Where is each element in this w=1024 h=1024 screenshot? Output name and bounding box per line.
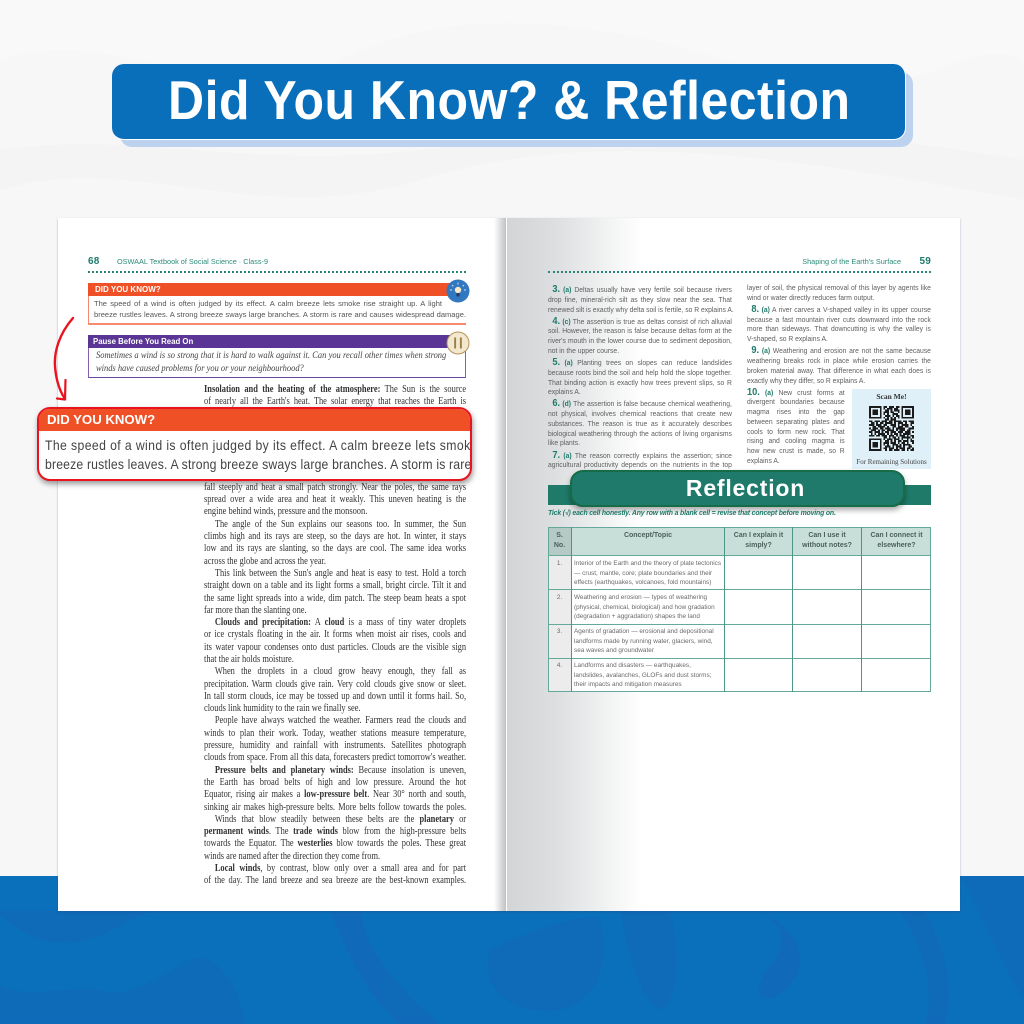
row 3: landforms made by running water, glaciers, wind, (574, 638, 713, 645)
text block: left page body: winds are named after the direction they come from. (204, 851, 380, 862)
callout header (39, 409, 470, 431)
text block: answers left column: 5. (a) Planting trees on slopes can reduce landslides (552, 356, 732, 368)
text block: answers left column: like plants. (548, 438, 580, 447)
text block: left page body: precipitation. Warm clouds give rain. Very cold clouds give snow or sleet. (204, 679, 466, 690)
text block: answers left column: 6. (d) The assertion is false because chemical weathering, (552, 397, 732, 409)
box text: breeze rustles leaves. A strong breeze sways large branches. A storm is rare and causes widespread damage. (94, 310, 466, 319)
text block: answers right column: 9. (a) Weathering and erosion are not the same because (751, 344, 931, 356)
dotted rule (548, 271, 931, 273)
table header background (548, 527, 931, 555)
page number: 59 (919, 256, 931, 267)
text block: answers right column: rising and cooling magma is (747, 436, 845, 445)
text block: answers left column: That binding action is exactly how trees prevent slips, so R (548, 378, 732, 387)
row 1 (557, 560, 721, 586)
row 4: their impacts and mitigation measures (574, 681, 682, 688)
callout text (45, 438, 472, 472)
text block: answers right column: how new crust is made, so R (747, 446, 845, 455)
open book (58, 218, 960, 911)
row 2 (557, 594, 715, 620)
text block: answers left column: agricultural productivity depends on the nutrients in the top (548, 460, 732, 469)
row 1: effects (earthquakes, volcanoes, fold mountains) (574, 579, 711, 586)
text block: left page body: the same light spreads into a wide, dim patch. The steep beam heats a spot (204, 593, 466, 604)
text block: answers right column: wind or water directly reduces farm output. (747, 293, 874, 302)
text block: left page body: far more than the slanting one. (204, 605, 307, 616)
text block: answers right column: magma rises into the gap (747, 407, 845, 416)
row 3: Agents of gradation — erosional and depositional (574, 628, 714, 635)
text block: answers right column: more than sideways. That downcutting is why the valley is (747, 324, 931, 333)
text block: answers left column: river's mouth in the lower course due to sediment deposition, (548, 336, 732, 345)
text block: answers right column: weathering breaks rock in place while erosion carries the (747, 356, 931, 365)
title text: Did You Know? & Reflection (168, 69, 851, 131)
text block: left page body: Local winds, by contrast, blow only over a small area and for part (215, 863, 466, 874)
dotted rule (88, 271, 466, 273)
header labels: without notes? (802, 542, 852, 549)
text block: insolation paragraph start (204, 384, 466, 407)
row 2: Weathering and erosion — types of weathering (574, 594, 707, 601)
text block: left page body: engine behind winds, pressure and the monsoon. (204, 506, 367, 517)
row 4: 4. (557, 662, 562, 669)
text block: left page body: The angle of the Sun explains our seasons too. In summer, the Sun (215, 519, 466, 530)
S.No column shade (548, 555, 571, 692)
row 3: 3. (557, 628, 562, 635)
text block: left page body: its water vapour condenses onto dust particles. Clouds are the visible sign (204, 642, 466, 653)
left page header (88, 256, 466, 273)
icon: QR code (869, 406, 914, 451)
spine shadow on right page (507, 218, 642, 911)
text block: left page body: fall steeply and heat a small patch strongly. Near the poles, the same rays (204, 482, 466, 493)
row 1: Interior of the Earth and the theory of plate tectonics (574, 560, 721, 567)
banner shadow (120, 72, 913, 147)
text block: answers right column: because a fast mountain river cuts downward into the rock (747, 315, 931, 324)
callout: enlarged did you know (37, 407, 472, 481)
icon: pause symbol (446, 332, 470, 354)
text block: answers left column: explains A. (548, 387, 581, 396)
text block: left page body (204, 482, 466, 886)
text block: answers left column: soil. However, the reason is false because deltas form at the (548, 326, 732, 335)
header labels (554, 532, 923, 549)
text block: answers right column: explains A. (747, 456, 780, 465)
text block: answers right column (747, 283, 931, 465)
text block: answers left column: renewed silt is exactly why delta soil is fertile, so R explains A. (548, 304, 734, 314)
scan heading: Scan Me! (876, 392, 907, 401)
text block: left page body: Winds that blow steadily between these belts are the planetary or (215, 814, 466, 825)
text block: left page body: sinking air makes high-pressure belts. More belts follow towards the poles. (204, 802, 466, 813)
box text (94, 299, 466, 319)
text block: answers right column: 8. (a) A river carves a V-shaped valley in its upper course (751, 303, 931, 315)
icon: light bulb (446, 280, 470, 302)
row 4: landslides, avalanches, GLOFs and dust storms; (574, 672, 711, 679)
text block: answers left column: 4. (c) The assertion is true as deltas consist of rich alluvial (552, 315, 732, 327)
arrow: callout pointer (54, 316, 74, 401)
text block: left page body: Equator, rising air makes a low-pressure belt. Near 30° north and south, (204, 789, 466, 800)
running head: OSWAAL Textbook of Social Science · Class-9 (117, 257, 268, 266)
header labels: Can I use it (808, 532, 846, 539)
page number: 68 (88, 256, 100, 267)
panel: pause before you read on (88, 335, 466, 378)
box header (88, 283, 466, 296)
row 4: Landforms and disasters — earthquakes, (574, 662, 691, 669)
panel: scan me QR (852, 389, 931, 469)
header labels: Can I explain it (734, 532, 783, 539)
row 4 (557, 662, 711, 688)
text block: left page body: winds to plan their work. Today, weather stations measure temperature, (204, 728, 466, 739)
text block: answers right column: cools to form new rock. That (747, 427, 845, 436)
text block: answers left column: not in the upper course. (548, 346, 619, 355)
S.No header shade (548, 527, 571, 555)
box text: The speed of a wind is often judged by its effect. A calm breeze lets smoke rise straight up. A light (94, 299, 442, 308)
row 3 (557, 628, 714, 654)
text block: left page body: that the air holds moisture. (204, 654, 294, 665)
table: reflection checklist (548, 527, 931, 692)
text block: left page body: clouds link humidity to the rain we finally see. (204, 703, 361, 714)
header labels: No. (554, 542, 565, 549)
text block: answers right column: divergent boundaries because (747, 397, 845, 406)
text block: answers left column: biological weathering through the actions of living organisms (548, 429, 732, 438)
text block: left page body: spread over a wide area and heat it weakly. This uneven heating is the (204, 494, 466, 505)
text block: answers right column: between separating plates and (747, 417, 845, 426)
row 3: sea waves and groundwater (574, 647, 654, 654)
text block: answers left column: substances. The reason is true as it accurately describes (548, 419, 732, 428)
text block: answers right column: 10. (a) New crust forms at (747, 386, 845, 398)
text block: left page body: straight down on a table and its light forms a small, bright circle. Tilt it and (204, 580, 466, 591)
header labels: elsewhere? (877, 542, 916, 549)
heading: reflection pill: Reflection (686, 475, 805, 501)
text block: answers right column: layer of soil, the physical removal of this layer by agents like (747, 283, 931, 292)
pause text: winds have caused problems for you or your neighbourhood? (96, 363, 304, 374)
row 1: — crust, mantle, core; plate boundaries and their (574, 570, 712, 577)
text block: answers left column: not physical, involves chemical reactions that create new (548, 409, 732, 418)
band: reflection backing bar (548, 485, 931, 505)
text block: answers right column: V-shaped, so R explains A. (747, 334, 828, 343)
row 1: 1. (557, 560, 562, 567)
scan caption: For Remaining Solutions (856, 458, 927, 466)
text block: left page body: This link between the Sun's angle and heat is easy to test. Hold a torch (215, 568, 466, 579)
pause header: Pause Before You Read On (93, 337, 193, 346)
header labels: simply? (745, 542, 772, 549)
text block: left page body: permanent winds. The trade winds blow from the high-pressure belts (204, 826, 466, 837)
text block: left page body: climbs high and its rays are steep, so the days are hot. In winter, it stays (204, 531, 466, 542)
text block: left page body: Pressure belts and planetary winds: Because insolation is uneven, (215, 765, 466, 776)
text block: left page body: towards the Equator. The westerlies blow towards the poles. These great (204, 838, 466, 849)
text block: insolation paragraph start: Insolation and the heating of the atmosphere: The Sun is the source (204, 384, 466, 395)
spine shadow on left page (494, 218, 506, 911)
row 2: 2. (557, 594, 562, 601)
box header: DID YOU KNOW? (95, 285, 161, 294)
text block: insolation paragraph start: of nearly all the Earth's heat. The solar energy that reaches the Earth is (204, 396, 466, 407)
text block: answers right column: broken material away. That difference in what each does is (747, 366, 931, 375)
heading: reflection pill (570, 470, 905, 507)
pause header (88, 335, 466, 348)
pause text: Sometimes a wind is so strong that it is hard to walk against it. Can you recall other times when strong (96, 350, 446, 361)
row 2: (physical, chemical, biological) and how gradation (574, 604, 715, 611)
table grid (548, 527, 931, 692)
instruction note: Tick (√) each cell honestly. Any row with a blank cell = revise that concept before moving on. (548, 510, 836, 517)
text block: left page body: In tall storm clouds, ice may be tossed up and down until it forms hail. So, (204, 691, 466, 702)
running head: Shaping of the Earth's Surface (802, 257, 901, 266)
banner face (112, 64, 906, 140)
title banner (112, 64, 913, 147)
right page header (548, 256, 931, 273)
row 2: (degradation + aggradation) shapes the land (574, 613, 700, 620)
text block: answers left column (548, 283, 734, 469)
text block: answers left column: 3. (a) Deltas usually have very fertile soil because rivers (552, 283, 732, 295)
text block: left page body: clouds from space. From all this data, forecasters predict tomorrow's weather. (204, 752, 466, 763)
text block: left page body: or ice crystals floating in the air. It forms when moist air rises, cools and (204, 629, 466, 640)
text block: left page body: across the globe and across the year. (204, 556, 326, 567)
pause text (96, 350, 446, 374)
text block: left page body: low and its rays are slanting, so the days are cool. The same idea works (204, 543, 466, 554)
header labels: S. (556, 532, 563, 539)
text block: answers left column: because roots bind the soil and help hold the slope together. (548, 368, 732, 377)
callout header: DID YOU KNOW? (47, 412, 155, 427)
text block: left page body: of the day. The land breeze and sea breeze are the best-known examples. (204, 875, 466, 886)
header labels: Can I connect it (870, 532, 923, 539)
text block: left page body: People have always watched the weather. Farmers read the clouds and (215, 715, 466, 726)
text block: left page body: When the droplets in a cloud grow heavy enough, they fall as (215, 666, 466, 677)
text block: left page body: the Earth has broad belts of high and low pressure. Around the hot (204, 777, 466, 788)
text block: left page body: Clouds and precipitation: A cloud is a mass of tiny water droplets (215, 617, 466, 628)
text block: answers left column: 7. (a) The reason correctly explains the assertion; since (552, 449, 732, 461)
header labels: Concept/Topic (624, 532, 672, 539)
text block: answers right column: exactly why they differ, so R explains A. (747, 376, 865, 385)
text block: answers left column: drop fine, mineral-rich silt as they slow near the sea. That (548, 295, 732, 304)
panel: did you know small box (88, 283, 466, 325)
text block: left page body: pressure, humidity and rainfall with instruments. Satellites photograph (204, 740, 466, 751)
